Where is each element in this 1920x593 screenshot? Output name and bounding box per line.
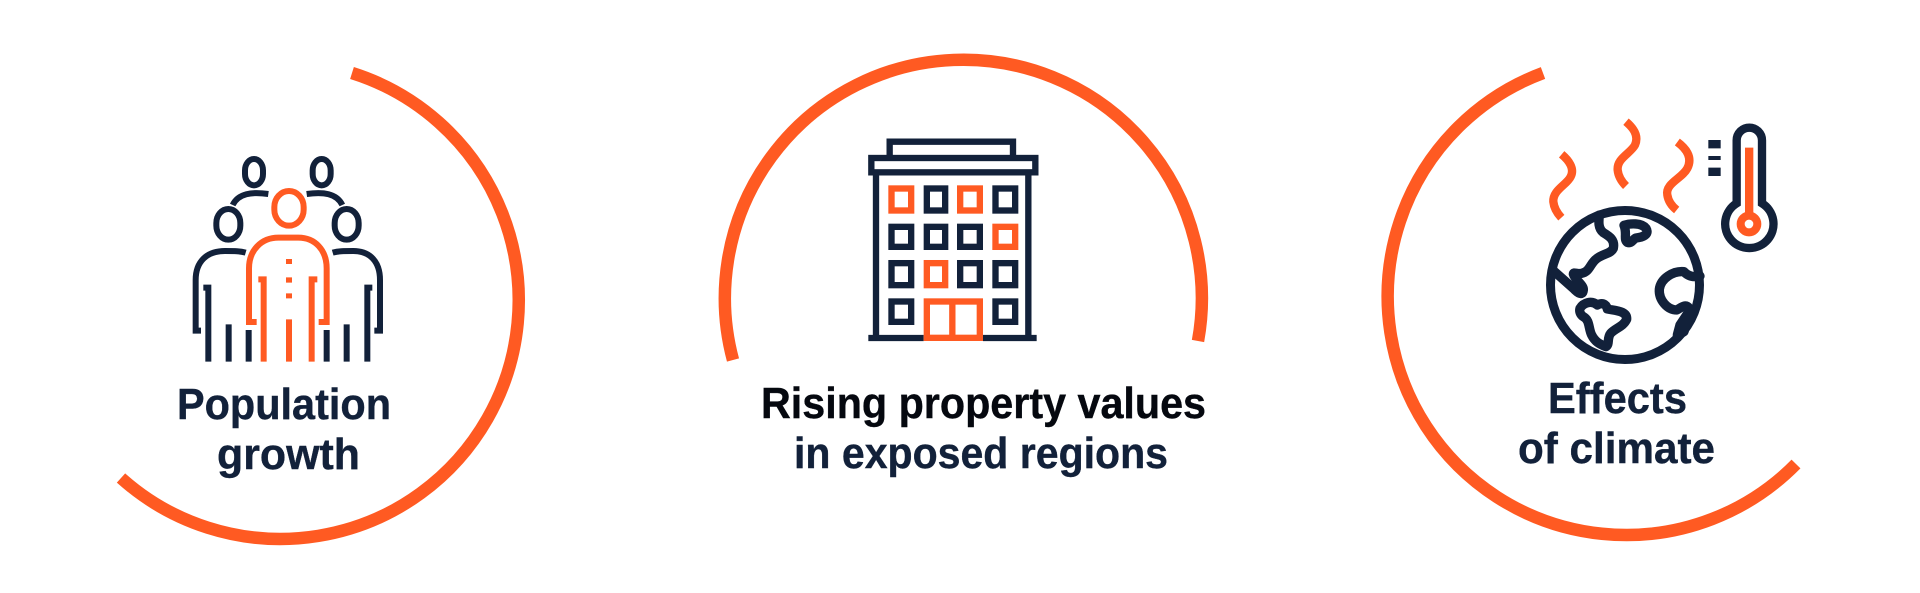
panel: effects of climate	[1388, 73, 1796, 535]
thermometer	[1708, 128, 1773, 248]
arc: property values ring	[725, 60, 1202, 360]
heading: effects of climate: Effects	[1548, 374, 1687, 423]
heading: effects of climate	[1518, 374, 1715, 473]
heading: rising property values	[761, 379, 1206, 478]
heading: population growth	[177, 380, 391, 479]
heading: population growth: Population	[177, 380, 391, 429]
icon: apartment building	[868, 142, 1037, 338]
panel: population growth	[121, 73, 519, 539]
icon: warming globe and thermometer	[1550, 122, 1773, 359]
arc: climate ring	[1388, 73, 1796, 535]
icon: group of people	[196, 159, 380, 362]
heading: rising property values: Rising property values	[761, 379, 1206, 428]
heading: population growth: growth	[217, 430, 360, 479]
heading: rising property values: in exposed regions	[794, 429, 1168, 478]
panel: rising property values	[725, 60, 1206, 478]
arc: population growth ring	[121, 73, 519, 539]
heading: effects of climate: of climate	[1518, 424, 1715, 473]
